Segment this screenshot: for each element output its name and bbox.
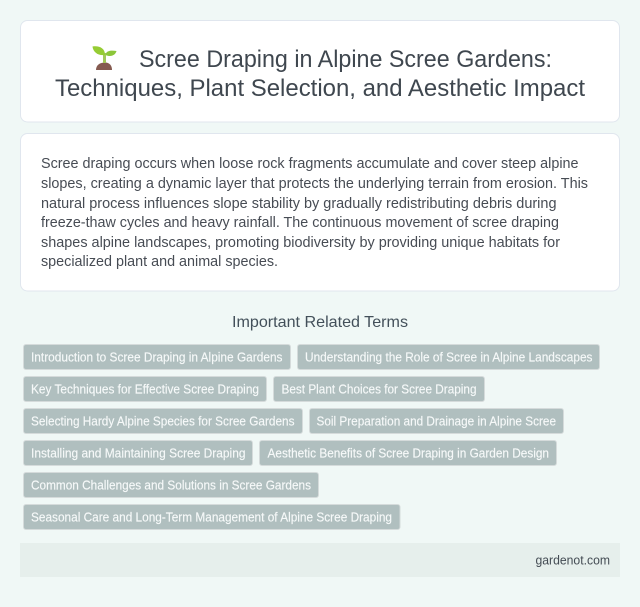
title: Techniques, Plant Selection, and Aesthetic Impact <box>55 75 585 102</box>
heading: important related terms: Important Related Terms <box>232 314 408 331</box>
tag <box>24 440 252 466</box>
footer <box>20 543 620 577</box>
tag: Understanding the Role of Scree in Alpine Landscapes <box>305 350 593 364</box>
tag <box>260 440 556 466</box>
text block: description: freeze-thaw cycles and heavy rainfall. The continuous movement of scree draping <box>41 215 559 231</box>
tag: Soil Preparation and Drainage in Alpine Scree <box>316 414 556 428</box>
tag: Introduction to Scree Draping in Alpine Gardens <box>31 350 283 364</box>
tag: Aesthetic Benefits of Scree Draping in Garden Design <box>268 446 549 460</box>
text block: description <box>41 156 588 270</box>
tag: Seasonal Care and Long-Term Management of Alpine Scree Draping <box>31 510 392 524</box>
text block: description: specialized plant and animal species. <box>41 254 278 270</box>
text block: description: slopes, creating a dynamic layer that protects the underlying terrain from erosion. This <box>41 176 588 192</box>
icon: sprout <box>92 46 116 70</box>
tag <box>24 472 318 498</box>
text block: description: shapes alpine landscapes, promoting biodiversity by providing unique habitats for <box>41 235 560 251</box>
tag list <box>24 344 600 530</box>
tag <box>24 408 302 434</box>
tag: Best Plant Choices for Scree Draping <box>282 382 476 396</box>
panel: title card <box>20 20 620 122</box>
title <box>55 46 585 102</box>
footer text: gardenot.com <box>536 554 610 568</box>
tag <box>310 408 564 434</box>
tag <box>24 376 266 402</box>
tag <box>24 344 290 370</box>
tag <box>24 504 400 530</box>
tag <box>298 344 600 370</box>
tag: Common Challenges and Solutions in Scree Gardens <box>31 478 311 492</box>
panel: description <box>20 134 620 291</box>
tag <box>274 376 484 402</box>
tag: Selecting Hardy Alpine Species for Scree Gardens <box>31 414 295 428</box>
text block: description: Scree draping occurs when loose rock fragments accumulate and cover steep alpine <box>41 156 578 172</box>
tag: Key Techniques for Effective Scree Draping <box>31 382 259 396</box>
text block: description: natural process influences slope stability by gradually redistributing debris during <box>41 196 556 212</box>
title: Scree Draping in Alpine Scree Gardens: <box>139 46 552 73</box>
tag: Installing and Maintaining Scree Draping <box>31 446 246 460</box>
